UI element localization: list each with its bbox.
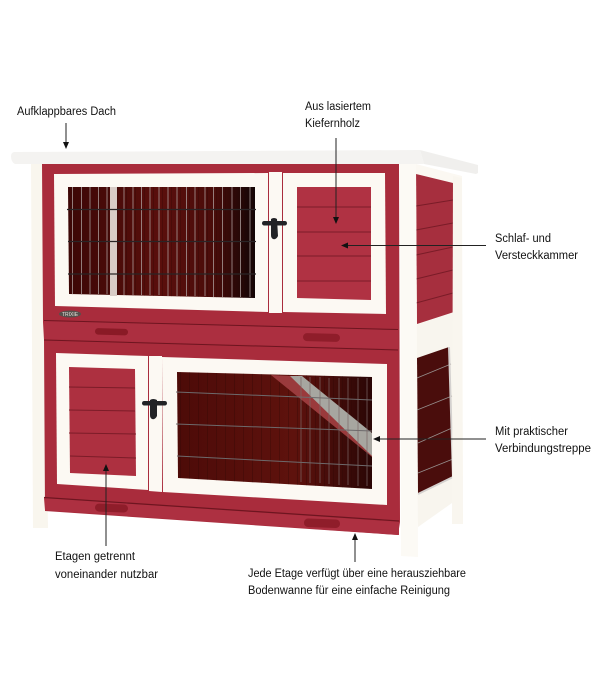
rabbit hutch — [11, 150, 478, 557]
lower wide door — [162, 357, 387, 505]
centre post upper — [269, 172, 282, 313]
upper drawer — [44, 320, 398, 350]
label: Etagen getrennt voneinander nutzbar: voneinander nutzbar — [55, 569, 158, 581]
arrow: wood — [333, 138, 339, 224]
lower drawer — [44, 498, 399, 535]
internal ramp — [271, 375, 372, 457]
side wall: lower mesh panel — [416, 310, 463, 527]
label: Aufklappbares Dach: Aufklappbares Dach — [17, 106, 116, 118]
label: Aus lasiertem Kiefernholz: Aus lasiertem — [305, 101, 371, 113]
lower latch — [142, 399, 167, 419]
right front post — [400, 164, 418, 557]
upper small door — [283, 173, 386, 314]
brand badge: TRIXIE — [62, 312, 79, 318]
arrow: sleeping chamber — [341, 242, 486, 248]
lower small door — [56, 353, 148, 490]
brand badge — [59, 310, 81, 318]
label: Jede Etage Bodenwanne: Jede Etage verfügt über eine herausziehbare — [248, 568, 466, 580]
red front body — [42, 164, 400, 535]
centre post lower — [149, 356, 162, 492]
label: Schlaf- und Versteckkammer: Versteckkammer — [495, 250, 578, 262]
label: Mit praktischer Verbindungstreppe: Verbindungstreppe — [495, 443, 591, 455]
rear right post — [452, 176, 463, 524]
label: Aus lasiertem Kiefernholz: Kiefernholz — [305, 118, 360, 130]
upper latch — [262, 218, 287, 239]
roof — [11, 150, 478, 174]
side wall: upper red panel — [416, 164, 462, 330]
upper wide door — [54, 173, 268, 312]
label: Etagen getrennt voneinander nutzbar: Etagen getrennt — [55, 551, 136, 563]
arrow: roof — [63, 123, 69, 149]
left front post — [31, 164, 48, 528]
arrow: floors — [103, 464, 109, 546]
label: Schlaf- und Versteckkammer: Schlaf- und — [495, 233, 551, 245]
arrow: tray — [352, 533, 358, 562]
arrow: ramp — [373, 436, 486, 442]
label: Mit praktischer Verbindungstreppe: Mit praktischer — [495, 426, 568, 438]
label: Jede Etage Bodenwanne: Bodenwanne für eine einfache Reinigung — [248, 585, 450, 597]
